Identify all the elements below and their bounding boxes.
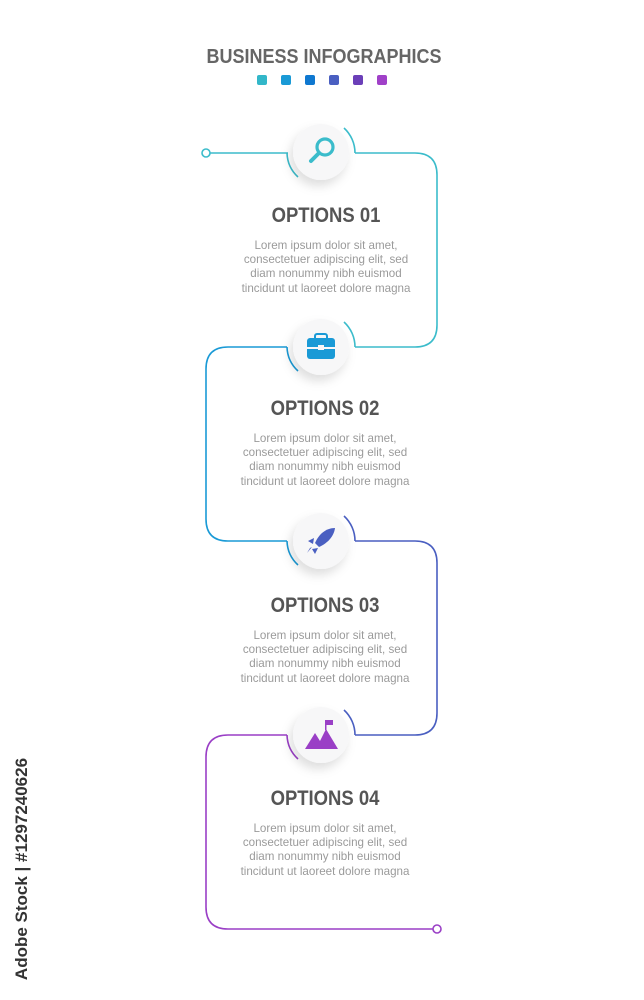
option 02: consectetuer adipiscing elit, sed <box>243 446 407 459</box>
option 03: diam nonummy nibh euismod <box>249 657 401 670</box>
watermark id: Adobe Stock | #1297240626 <box>12 758 31 980</box>
option 04: consectetuer adipiscing elit, sed <box>243 836 407 849</box>
option 03 <box>240 594 410 685</box>
icon circle 4: mountain flag <box>293 707 349 763</box>
option 03: OPTIONS 03 <box>271 594 379 617</box>
option 01: Lorem ipsum dolor sit amet, <box>254 239 398 252</box>
option 02: tincidunt ut laoreet dolore magna <box>241 475 409 488</box>
icon circle 3: rocket <box>293 513 349 569</box>
option 01 <box>242 204 410 295</box>
option 04: Lorem ipsum dolor sit amet, <box>253 822 397 835</box>
icon circle 1: magnifier <box>293 124 349 180</box>
option 04: tincidunt ut laoreet dolore magna <box>241 865 409 878</box>
option 01: OPTIONS 01 <box>272 204 380 227</box>
option 02: Lorem ipsum dolor sit amet, <box>253 432 397 445</box>
title: BUSINESS INFOGRAPHICS <box>206 46 442 68</box>
connector lines <box>202 128 441 933</box>
option 04: diam nonummy nibh euismod <box>249 850 401 863</box>
option 02: diam nonummy nibh euismod <box>249 460 401 473</box>
option 02 <box>240 397 410 488</box>
option 02: OPTIONS 02 <box>271 397 379 420</box>
option 03: Lorem ipsum dolor sit amet, <box>253 629 397 642</box>
icon circle 2: briefcase <box>293 319 349 375</box>
option 01: tincidunt ut laoreet dolore magna <box>242 282 410 295</box>
option 01: consectetuer adipiscing elit, sed <box>244 253 408 266</box>
option 01: diam nonummy nibh euismod <box>250 267 402 280</box>
option 03: consectetuer adipiscing elit, sed <box>243 643 407 656</box>
option 04: OPTIONS 04 <box>271 787 379 810</box>
option 03: tincidunt ut laoreet dolore magna <box>241 672 409 685</box>
option 04 <box>240 787 410 878</box>
